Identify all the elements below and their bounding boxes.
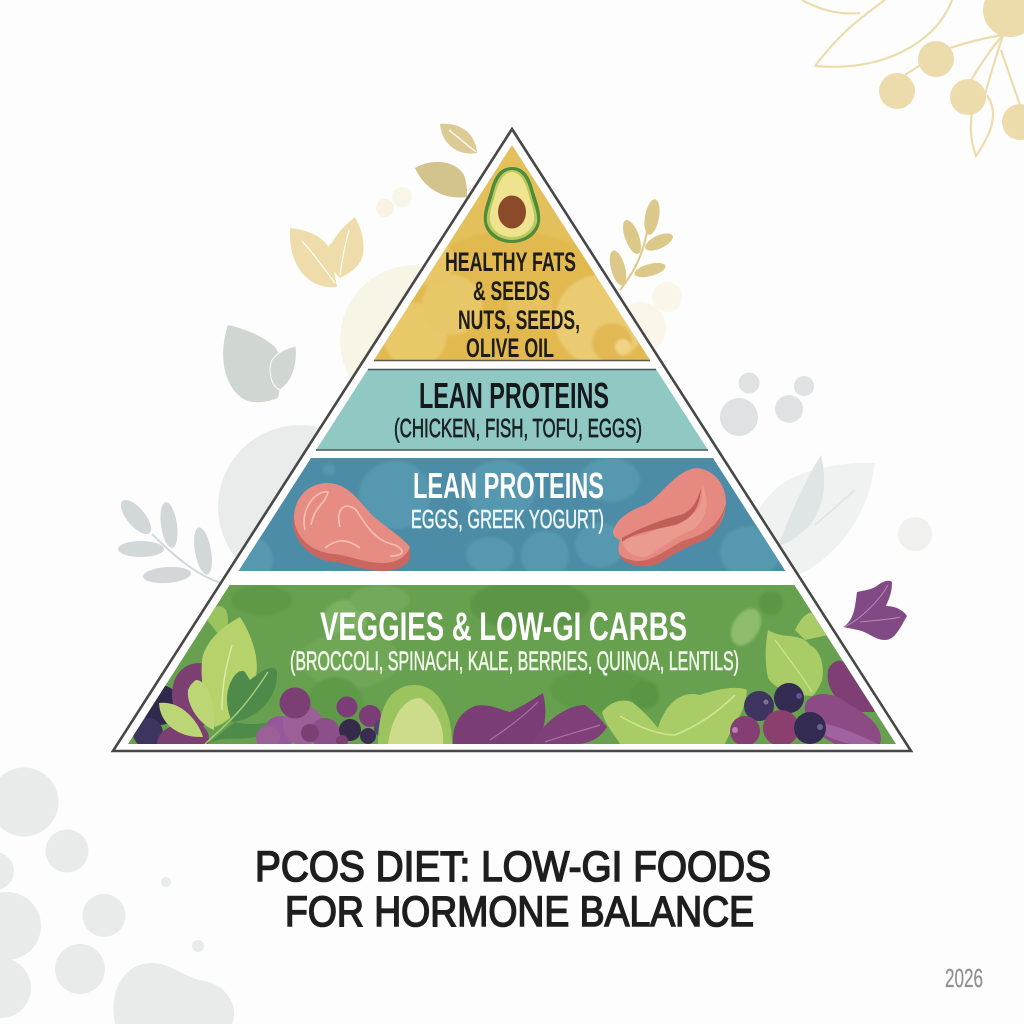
title: PCOS DIET: LOW-GI FOODS: [255, 843, 771, 891]
decorative botanical: top right: [802, 0, 1024, 156]
tier 1 text: & SEEDS: [473, 276, 550, 306]
purple berry bunch: [256, 688, 381, 744]
tier 4 heading: VEGGIES & LOW-GI CARBS: [320, 605, 687, 649]
tier 1 texture: [374, 231, 650, 367]
background circles behind pyramid: [218, 187, 682, 589]
light green leaves center right: [602, 688, 747, 744]
tier 4 background foliage: [234, 585, 782, 720]
left berries and leaves: [133, 606, 278, 748]
tier 4 produce: [133, 606, 881, 750]
decorative gold leaf pair: left: [290, 217, 364, 287]
decorative sprig: lower left: [116, 495, 221, 585]
tier 1 text: NUTS, SEEDS,: [458, 305, 580, 335]
decorative large leaf and bubbles: right: [720, 372, 932, 580]
decorative grey-green leaf: left: [223, 325, 296, 402]
icon: avocado: [484, 167, 540, 243]
decorative gold leaves: upper pyramid: [415, 124, 477, 198]
tier 1 text: OLIVE OIL: [466, 333, 554, 363]
dark base line: [374, 360, 650, 362]
tier 2 heading: LEAN PROTEINS: [419, 375, 609, 416]
center pear: [378, 685, 452, 744]
tier 3: lean proteins (blue): [237, 458, 785, 582]
tier 2 edge lines: [316, 370, 708, 450]
tier 2: lean proteins (teal): [316, 369, 708, 450]
right purple fruit and berries: [730, 661, 881, 746]
pyramid outline: [113, 129, 911, 751]
title: FOR HORMONE BALANCE: [285, 888, 754, 936]
tier 2 examples: (CHICKEN, FISH, TOFU, EGGS): [394, 413, 642, 443]
tier 1 text: HEALTHY FATS: [445, 247, 576, 277]
tier 1 text: [445, 247, 580, 363]
tier 4: veggies and low-GI carbs: [128, 579, 896, 750]
decorative bubbles: lower left: [0, 768, 234, 1024]
tier 1: healthy fats: [374, 145, 650, 367]
tier 3 heading: LEAN PROTEINS: [413, 465, 604, 506]
icon: floating purple leaf: [843, 581, 907, 640]
purple leaves center: [453, 693, 607, 744]
right leaf: [766, 613, 828, 696]
tier 3 texture: [237, 458, 780, 582]
decorative sprig: right of pyramid: [607, 198, 675, 290]
year label: 2026: [945, 963, 983, 993]
title: [255, 843, 771, 936]
icon: right meat: [613, 468, 726, 566]
tier 3 examples: EGGS, GREEK YOGURT): [411, 504, 604, 534]
icon: left meat: [293, 483, 410, 571]
